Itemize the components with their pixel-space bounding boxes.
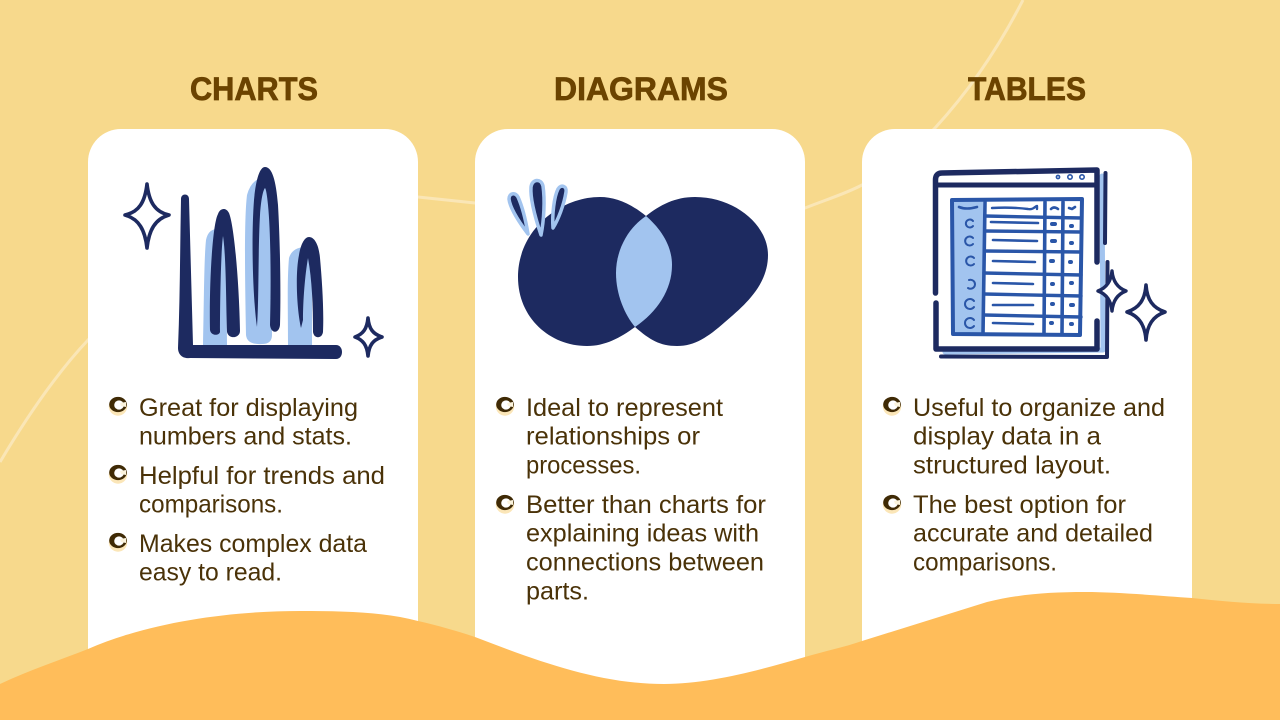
heading: tables: TABLES (968, 71, 1086, 107)
icon: bar chart sketch (125, 167, 382, 359)
icon: table sketch (936, 170, 1165, 357)
bullet list: diagrams: connections between (526, 548, 764, 576)
bullet list: diagrams: Better than charts for (526, 491, 766, 519)
heading: charts: CHARTS (190, 71, 318, 107)
bullet list: tables: The best option for (913, 491, 1126, 519)
bullet list: charts: easy to read. (139, 558, 282, 586)
heading: diagrams: DIAGRAMS (554, 71, 728, 107)
bullet list: charts (109, 394, 385, 586)
bullet list: tables: Useful to organize and (913, 394, 1165, 422)
bullet list: tables: structured layout. (913, 452, 1111, 480)
bullet list: diagrams: parts. (526, 578, 589, 606)
bullet list: charts: numbers and stats. (139, 422, 352, 450)
card: tables (862, 129, 1192, 720)
panel: charts (88, 71, 418, 720)
bullet list: tables: display data in a (913, 422, 1101, 450)
bullet list: charts: Helpful for trends and (139, 462, 385, 490)
bullet list: diagrams: relationships or (526, 422, 700, 450)
bullet list: charts: Great for displaying (139, 394, 358, 422)
card: diagrams (475, 129, 805, 720)
bullet list: diagrams: explaining ideas with (526, 520, 759, 548)
bullet list: charts: comparisons. (139, 490, 283, 518)
bullet list: tables (883, 394, 1165, 576)
icon: venn diagram (509, 180, 768, 346)
bullet list: diagrams: processes. (526, 452, 641, 480)
bullet list: diagrams (496, 394, 766, 606)
panel: diagrams (475, 71, 805, 720)
bottom wave (0, 592, 1280, 720)
bullet list: tables: comparisons. (913, 548, 1057, 576)
bullet list: diagrams: Ideal to represent (526, 394, 723, 422)
bullet list: charts: Makes complex data (139, 530, 367, 558)
card: charts (88, 129, 418, 720)
panel: tables (862, 71, 1192, 720)
bullet list: tables: accurate and detailed (913, 520, 1153, 548)
